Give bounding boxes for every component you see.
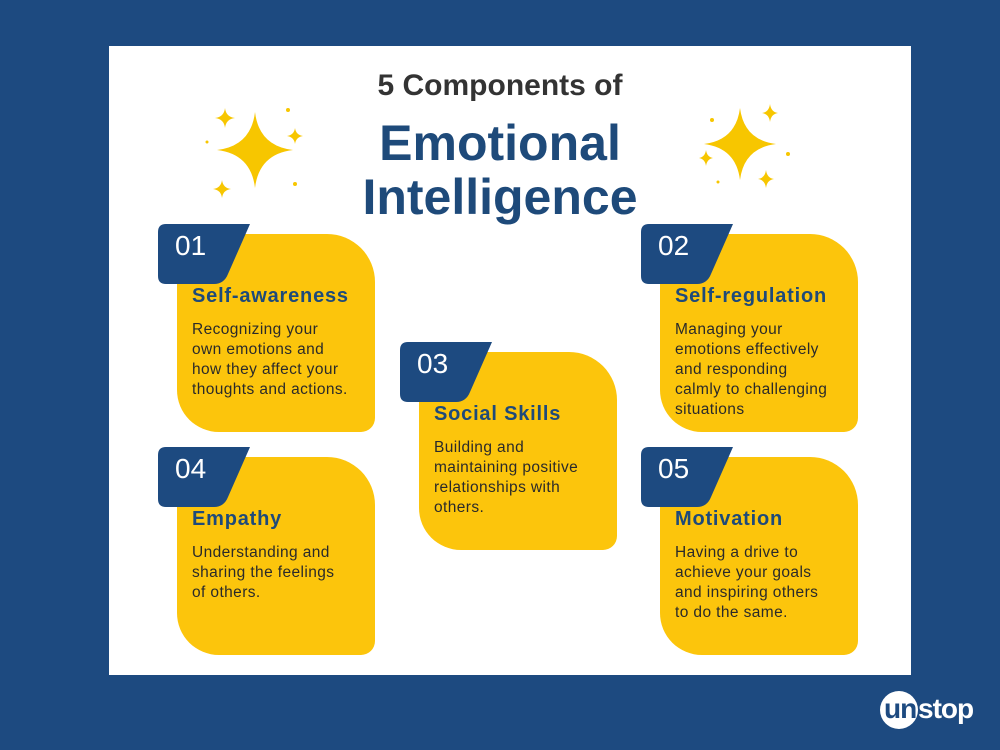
title: 5 Components of: 5 Components of: [378, 69, 622, 102]
card 02: calmly to challenging: [675, 381, 827, 398]
card 02: and responding: [675, 361, 787, 378]
card 01: thoughts and actions.: [192, 381, 348, 398]
tab 03: [400, 342, 492, 402]
card 04: [158, 447, 375, 655]
card 05: and inspiring others: [675, 584, 818, 601]
card 05: [641, 447, 858, 655]
card 01: how they affect your: [192, 361, 338, 378]
card 03: others.: [434, 499, 484, 516]
card 04: Understanding and: [192, 544, 330, 561]
card 04: of others.: [192, 584, 261, 601]
tab 02: [641, 224, 733, 284]
logo: unstop: un: [884, 693, 916, 724]
card 05: 05: [658, 453, 689, 484]
card 04: 04: [175, 453, 206, 484]
card 01: Self-awareness: [192, 285, 349, 307]
card 03: Social Skills: [434, 403, 561, 425]
card 01: own emotions and: [192, 341, 324, 358]
title: Emotional Intelligence: [362, 115, 638, 225]
icon: sparkles right: [699, 104, 790, 188]
card 02: Managing your: [675, 321, 783, 338]
logo: unstop: [880, 691, 973, 729]
card 02: 02: [658, 230, 689, 261]
white panel: [109, 46, 911, 675]
card 05: achieve your goals: [675, 564, 811, 581]
card 04: sharing the feelings: [192, 564, 334, 581]
icon: sparkles left: [206, 108, 303, 198]
card 02: situations: [675, 401, 744, 418]
tab 04: [158, 447, 250, 507]
card 03: [400, 342, 617, 550]
card 03: relationships with: [434, 479, 560, 496]
card 01: Recognizing your: [192, 321, 318, 338]
card 02: emotions effectively: [675, 341, 819, 358]
card 04: Empathy: [192, 508, 282, 530]
tab 01: [158, 224, 250, 284]
title: Emotional Intelligence: Intelligence: [362, 169, 638, 225]
card 02: Self-regulation: [675, 285, 827, 307]
card 03: Building and: [434, 439, 524, 456]
title: Emotional Intelligence: Emotional: [379, 115, 621, 171]
card 01: [158, 224, 375, 432]
card 02: [641, 224, 858, 432]
card 05: to do the same.: [675, 604, 788, 621]
card 01: 01: [175, 230, 206, 261]
tab 05: [641, 447, 733, 507]
logo: unstop: stop: [918, 693, 973, 724]
card 05: Motivation: [675, 508, 783, 530]
card 03: maintaining positive: [434, 459, 578, 476]
card 05: Having a drive to: [675, 544, 798, 561]
card 03: 03: [417, 348, 448, 379]
